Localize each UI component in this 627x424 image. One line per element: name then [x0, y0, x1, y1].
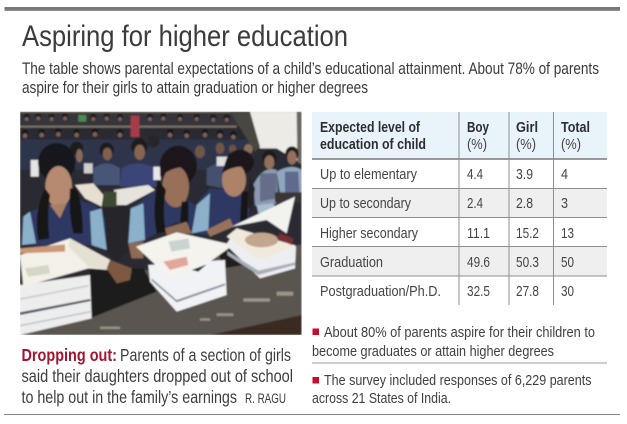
table rows: 50	[561, 255, 574, 271]
intro text	[22, 60, 599, 97]
table rows: 15.2	[516, 226, 539, 242]
bullet note: 80 percent	[312, 324, 595, 360]
top rule	[4, 7, 620, 11]
open book left	[20, 237, 112, 286]
table rows: 30	[561, 284, 574, 300]
table rows: Higher secondary	[320, 226, 419, 242]
row shading	[312, 188, 607, 276]
table rows	[320, 167, 574, 300]
table header text: Expected level of	[320, 120, 420, 136]
table header text: Total	[561, 120, 590, 136]
book stack left	[20, 275, 92, 335]
photo caption	[22, 345, 293, 407]
intro text: aspire for their girls to attain graduation or higher degrees	[22, 79, 368, 97]
table rows: 3.9	[516, 167, 533, 183]
table rows: 2.8	[516, 196, 533, 212]
table header text: (%)	[467, 137, 487, 153]
photo caption: said their daughters dropped out of school	[22, 366, 293, 386]
crowd background	[20, 112, 253, 170]
table header background	[312, 112, 607, 159]
photo caption: to help out in the family’s earnings	[22, 387, 237, 407]
table rows: 4.4	[467, 167, 483, 183]
dark bag	[103, 205, 130, 262]
photo caption: Dropping out:	[22, 345, 117, 365]
bullet note: survey size	[312, 372, 592, 407]
table rows: 4	[561, 167, 568, 183]
title: Aspiring for higher education	[22, 20, 348, 53]
table	[20, 245, 302, 335]
bullet note: 80 percent: become graduates or attain higher degrees	[312, 343, 554, 360]
table rows: 13	[561, 226, 574, 242]
table rows: 11.1	[467, 226, 490, 242]
table rows: 49.6	[467, 255, 490, 271]
table header text: (%)	[516, 137, 536, 153]
bullet note: survey size: across 21 States of India.	[312, 390, 451, 407]
photo caption: Parents of a section of girls	[120, 345, 291, 365]
table header text: Boy	[467, 120, 489, 136]
table rows: 32.5	[467, 284, 490, 300]
small books behind	[75, 183, 103, 207]
table	[312, 112, 607, 305]
photo: students reading textbooks	[20, 112, 302, 335]
background students	[31, 135, 302, 213]
open book middle	[135, 231, 230, 266]
table rows: Up to elementary	[320, 167, 418, 183]
table header text: Girl	[516, 120, 538, 136]
girl 2	[134, 192, 196, 243]
table rows: 27.8	[516, 284, 539, 300]
book stack right	[226, 238, 298, 280]
table header text	[320, 120, 590, 153]
table rows: Postgraduation/Ph.D.	[320, 284, 441, 300]
book stack middle	[148, 260, 227, 312]
table header text: education of child	[320, 137, 426, 153]
table rows: 3	[561, 196, 568, 212]
girl 3	[195, 188, 250, 235]
table rows: Up to secondary	[320, 196, 412, 212]
table header text: (%)	[561, 137, 581, 153]
wall	[249, 112, 298, 162]
raised page	[232, 197, 295, 233]
table rows: 50.3	[516, 255, 539, 271]
right students	[253, 169, 278, 212]
table rows: 2.4	[467, 196, 483, 212]
table rows: Graduation	[320, 255, 383, 271]
photo caption: R. RAGU	[245, 391, 286, 406]
girl 1	[26, 200, 107, 246]
table lines	[312, 112, 607, 305]
